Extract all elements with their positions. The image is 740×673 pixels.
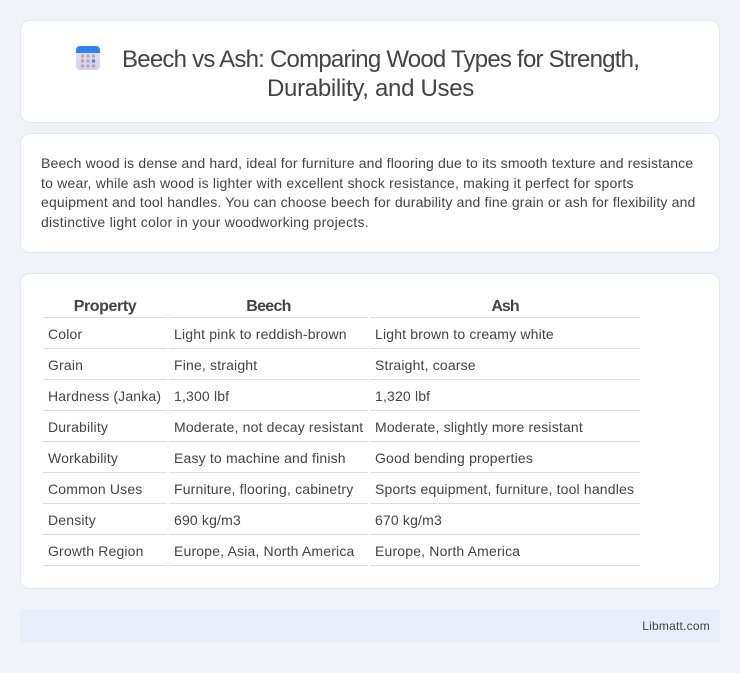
row: workability: Workability [48,450,118,466]
row: hardness: Hardness (Janka) [48,388,161,404]
row: grain [48,357,476,373]
row: density: Density [48,512,96,528]
row: color: Light pink to reddish-brown [174,326,347,342]
row: durability [48,419,583,435]
title: Beech vs Ash: Comparing Wood Types for Strength, [122,46,639,73]
row: color: Color [48,326,82,342]
table header [74,298,519,315]
text block: description: equipment and tool handles. You can choose beech for durability and fine grain or ash for flexibility and [41,194,696,210]
table header: Property [74,298,136,315]
row: grain: Grain [48,357,83,373]
row: color [48,326,554,342]
panel: description [20,133,720,253]
row: hardness: 1,300 lbf [174,388,229,404]
title: Durability, and Uses [267,75,474,102]
row: common uses: Furniture, flooring, cabinetry [174,481,353,497]
row: color: Light brown to creamy white [375,326,554,342]
row: durability: Moderate, not decay resistant [174,419,363,435]
row: growth region: Growth Region [48,543,144,559]
footer bar [20,609,720,642]
panel: title card [20,20,720,123]
text block: description: Beech wood is dense and hard, ideal for furniture and flooring due to its smooth texture and resistance [41,155,693,171]
row: density: 670 kg/m3 [375,512,442,528]
row: workability: Easy to machine and finish [174,450,346,466]
panel: comparison table [20,273,720,589]
row: common uses [48,481,634,497]
row: durability: Durability [48,419,108,435]
row: hardness: 1,320 lbf [375,388,430,404]
row: grain: Straight, coarse [375,357,476,373]
row: growth region: Europe, North America [375,543,520,559]
text block: description [41,155,696,230]
table header: Ash [491,298,519,315]
row: hardness [48,388,430,404]
text block: description: distinctive light color in your woodworking projects. [41,214,369,230]
row: growth region: Europe, Asia, North America [174,543,354,559]
row: common uses: Common Uses [48,481,142,497]
table header: Beech [246,298,291,315]
row: grain: Fine, straight [174,357,257,373]
row: growth region [48,543,520,559]
row: workability [48,450,533,466]
icon: calendar [76,46,100,70]
row: common uses: Sports equipment, furniture, tool handles [375,481,634,497]
footer text: Libmatt.com [642,619,710,633]
row: density: 690 kg/m3 [174,512,241,528]
row: workability: Good bending properties [375,450,533,466]
row: density [48,512,442,528]
row: durability: Moderate, slightly more resistant [375,419,583,435]
text block: description: to wear, while ash wood is lighter with excellent shock resistance, making it perfect for sports [41,174,634,190]
title [122,46,639,102]
